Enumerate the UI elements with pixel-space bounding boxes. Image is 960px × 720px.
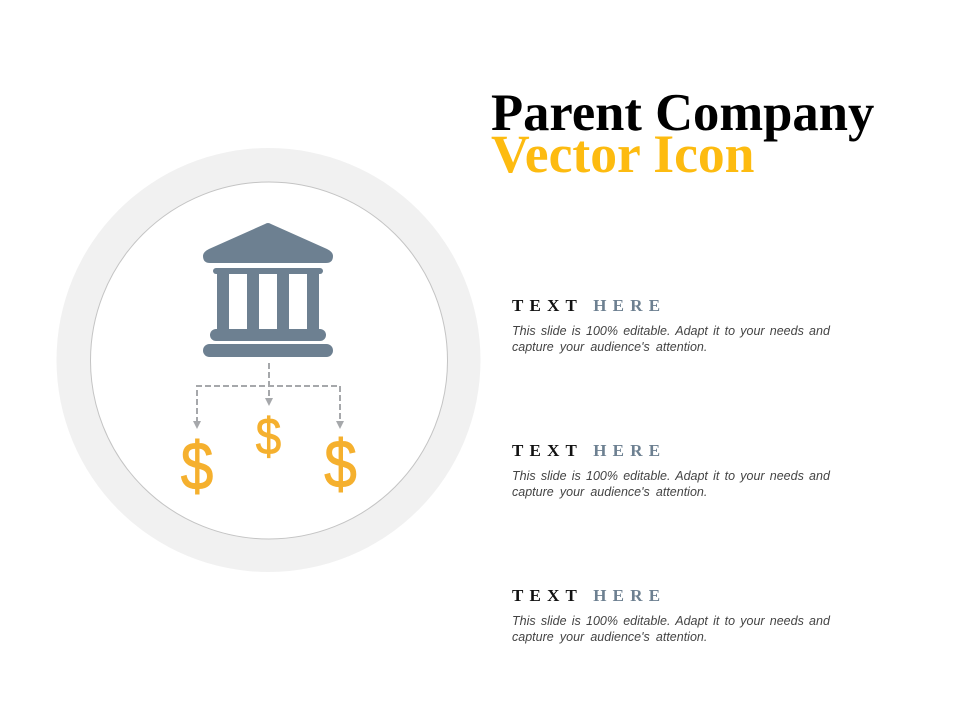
text block three	[512, 586, 830, 644]
text block two	[512, 441, 830, 499]
graphic: parent company diagram	[56, 148, 480, 572]
text block three: TEXT HERE	[512, 586, 666, 605]
icon: left dollar: $	[181, 429, 213, 505]
text block two: capture your audience's attention.	[512, 485, 707, 499]
text block one: This slide is 100% editable. Adapt it to your needs and	[512, 324, 830, 338]
outer grey ring	[56, 148, 480, 572]
text block one: capture your audience's attention.	[512, 340, 707, 354]
text block one: TEXT HERE	[512, 296, 666, 315]
title line one: Parent Company	[491, 84, 874, 142]
text block three: This slide is 100% editable. Adapt it to your needs and	[512, 614, 830, 628]
inner white circle	[90, 182, 448, 539]
text block three: capture your audience's attention.	[512, 630, 707, 644]
text block two: TEXT HERE	[512, 441, 666, 460]
text block two: This slide is 100% editable. Adapt it to your needs and	[512, 469, 830, 483]
title line two: Vector Icon	[491, 124, 754, 184]
icon: bank building	[203, 223, 333, 357]
icon: right dollar: $	[324, 427, 357, 503]
arrowheads	[193, 398, 344, 429]
arrows: dashed connectors	[197, 363, 340, 423]
icon: center dollar: $	[256, 408, 281, 466]
text block one	[512, 296, 830, 354]
